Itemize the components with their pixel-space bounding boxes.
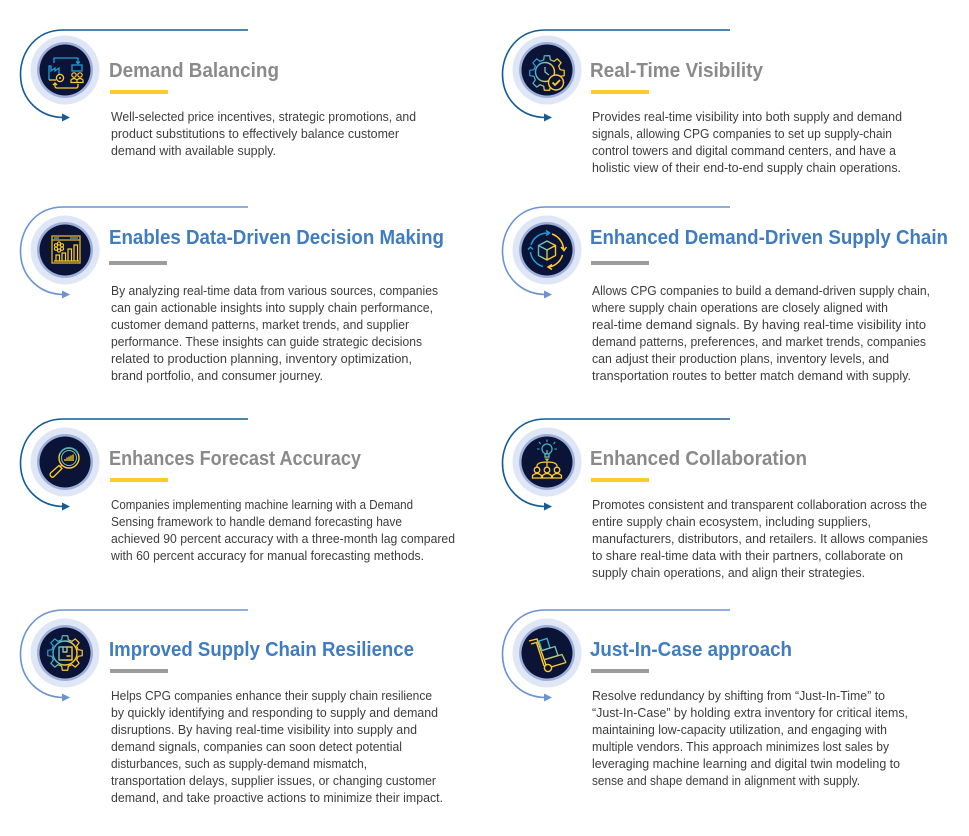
body text: product substitutions to effectively balance customer xyxy=(111,127,399,141)
accent bar xyxy=(110,669,168,673)
body text xyxy=(110,498,455,563)
body text: signals, allowing CPG companies to set up supply-chain xyxy=(592,127,892,141)
heading: Enables Data-Driven Decision Making xyxy=(109,227,444,249)
panel: Enhanced Collaboration xyxy=(502,419,928,580)
accent bar xyxy=(591,478,649,482)
body text xyxy=(111,689,443,805)
body text: demand signals, companies can soon detect potential xyxy=(111,740,402,754)
panel: Improved Supply Chain Resilience xyxy=(20,610,443,805)
body text: multiple vendors. This approach minimizes lost sales by xyxy=(592,740,890,754)
accent bar xyxy=(110,478,168,482)
arc arrow xyxy=(20,30,248,122)
arc arrow xyxy=(502,207,730,298)
body text: related to production planning, inventory optimization, xyxy=(111,352,412,366)
heading: Just-In-Case approach xyxy=(590,639,792,661)
body text: manufacturers, distributors, and retailers. It allows companies xyxy=(592,532,928,546)
icon: box with cycle arrows xyxy=(512,216,582,284)
panel: Enhanced Demand-Driven Supply Chain xyxy=(502,207,948,383)
body text: sense and shape demand in alignment with supply. xyxy=(592,774,860,788)
arc arrow xyxy=(20,207,248,298)
body text: By analyzing real-time data from various sources, companies xyxy=(111,284,438,298)
panel: Enables Data-Driven Decision Making xyxy=(20,207,444,383)
body text: control towers and digital command centers, and have a xyxy=(592,144,896,158)
body text: by quickly identifying and responding to supply and demand xyxy=(111,706,438,720)
body text: disruptions. By having real-time visibility into supply and xyxy=(111,723,417,737)
body text: achieved 90 percent accuracy with a three-month lag compared xyxy=(111,532,455,546)
arc arrow xyxy=(502,30,730,122)
body text: to share real-time data with their partners, collaborate on xyxy=(592,549,903,563)
body text: brand portfolio, and consumer journey. xyxy=(111,369,323,383)
body text: supply chain operations, and align their strategies. xyxy=(592,566,865,580)
body text: “Just-In-Case” by holding extra inventory for critical items, xyxy=(592,706,908,720)
heading: Enhances Forecast Accuracy xyxy=(109,448,362,470)
arc arrow xyxy=(20,419,248,510)
icon: gear clock check xyxy=(512,36,582,104)
icon: gear with package xyxy=(30,618,100,688)
body text: Well-selected price incentives, strategic promotions, and xyxy=(111,110,416,124)
body text: can gain actionable insights into supply chain performance, xyxy=(111,301,433,315)
heading: Real-Time Visibility xyxy=(590,60,764,82)
heading: Enhanced Demand-Driven Supply Chain xyxy=(590,227,948,249)
icon: magnifier with chart xyxy=(30,428,100,496)
body text: can adjust their production plans, inventory levels, and xyxy=(592,352,889,366)
body text: Helps CPG companies enhance their supply chain resilience xyxy=(111,689,432,703)
body text xyxy=(592,498,928,580)
accent bar xyxy=(591,261,649,265)
body text: performance. These insights can guide strategic decisions xyxy=(111,335,422,349)
panel: Just-In-Case approach xyxy=(502,610,908,788)
body text: entire supply chain ecosystem, including suppliers, xyxy=(592,515,871,529)
body text: demand with available supply. xyxy=(111,144,276,158)
body text: real-time demand signals. By having real-time visibility into xyxy=(592,318,926,332)
body text xyxy=(592,110,902,175)
body text: where supply chain operations are closely aligned with xyxy=(591,301,888,315)
accent bar xyxy=(109,261,167,265)
panel: Real-Time Visibility xyxy=(502,30,902,175)
body text: leveraging machine learning and digital twin modeling to xyxy=(592,757,900,771)
body text xyxy=(111,110,416,158)
heading: Enhanced Collaboration xyxy=(590,448,807,470)
body text: demand patterns, preferences, and market trends, companies xyxy=(592,335,926,349)
body text: Companies implementing machine learning with a Demand xyxy=(111,498,413,512)
accent bar xyxy=(591,90,649,94)
body text: Promotes consistent and transparent collaboration across the xyxy=(592,498,927,512)
icon: data dashboard xyxy=(30,216,100,284)
body text: transportation routes to better match demand with supply. xyxy=(592,369,911,383)
icon: hand truck with boxes xyxy=(512,618,582,688)
heading: Improved Supply Chain Resilience xyxy=(109,639,414,661)
body text: maintaining low-capacity utilization, and engaging with xyxy=(592,723,887,737)
arc arrow xyxy=(502,419,730,510)
body text xyxy=(591,284,930,383)
accent bar xyxy=(110,90,168,94)
body text: Sensing framework to handle demand forecasting have xyxy=(111,515,402,529)
arc arrow xyxy=(20,610,248,702)
body text: Allows CPG companies to build a demand-driven supply chain, xyxy=(592,284,930,298)
icon: demand balancing xyxy=(30,36,100,104)
body text xyxy=(592,689,908,788)
panel: Enhances Forecast Accuracy xyxy=(20,419,455,563)
arc arrow xyxy=(502,610,730,702)
body text xyxy=(111,284,438,383)
body text: with 60 percent accuracy for manual forecasting methods. xyxy=(110,549,424,563)
body text: holistic view of their end-to-end supply chain operations. xyxy=(592,161,901,175)
accent bar xyxy=(591,669,649,673)
panel: Demand Balancing xyxy=(20,30,416,158)
body text: disturbances, such as supply-demand mismatch, xyxy=(111,757,367,771)
icon: light bulb and team xyxy=(512,428,582,496)
body text: customer demand patterns, market trends, and supplier xyxy=(111,318,409,332)
heading: Demand Balancing xyxy=(109,60,279,82)
body text: Resolve redundancy by shifting from “Just-In-Time” to xyxy=(592,689,885,703)
body text: Provides real-time visibility into both supply and demand xyxy=(592,110,902,124)
body text: demand, and take proactive actions to minimize their impact. xyxy=(111,791,443,805)
body text: transportation delays, supplier issues, or changing customer xyxy=(111,774,436,788)
